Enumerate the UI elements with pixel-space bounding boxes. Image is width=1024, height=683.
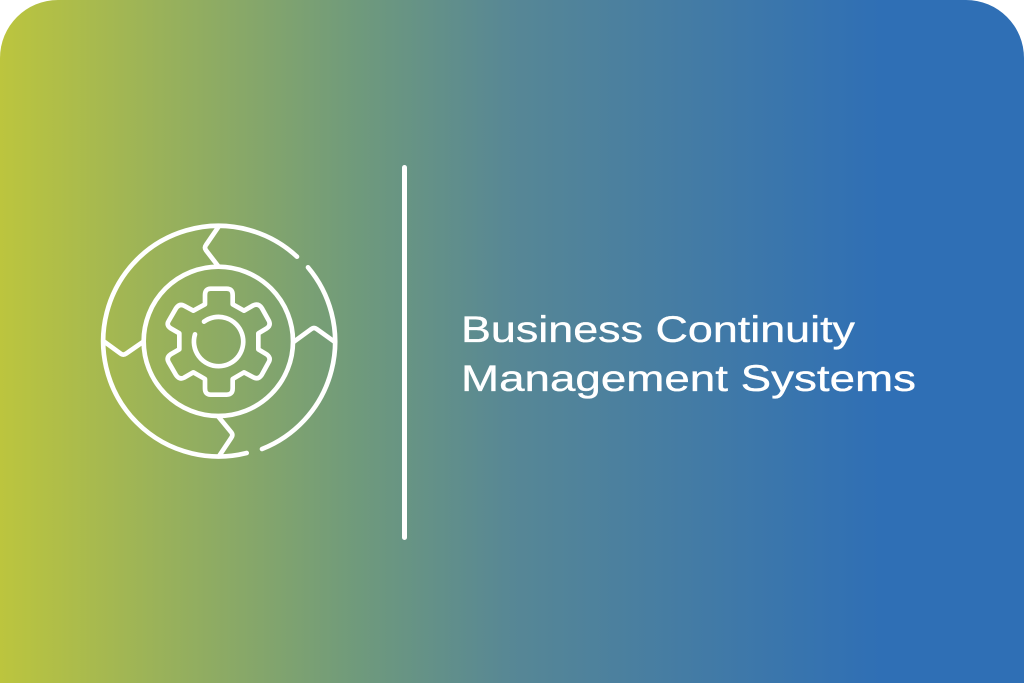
icon part: ring connectors — [103, 227, 334, 456]
heading line 2: Management Systems — [461, 358, 916, 399]
divider line — [402, 165, 407, 540]
icon: gear inside circular cycle — [103, 226, 335, 456]
heading line 1: Business Continuity — [461, 309, 856, 350]
icon part: outer ring arcs — [103, 226, 335, 456]
icon part: inner ring — [144, 267, 293, 416]
icon part: gear outline — [168, 289, 270, 395]
icon part: gear centre arc — [194, 317, 243, 366]
heading: title text — [461, 309, 916, 399]
